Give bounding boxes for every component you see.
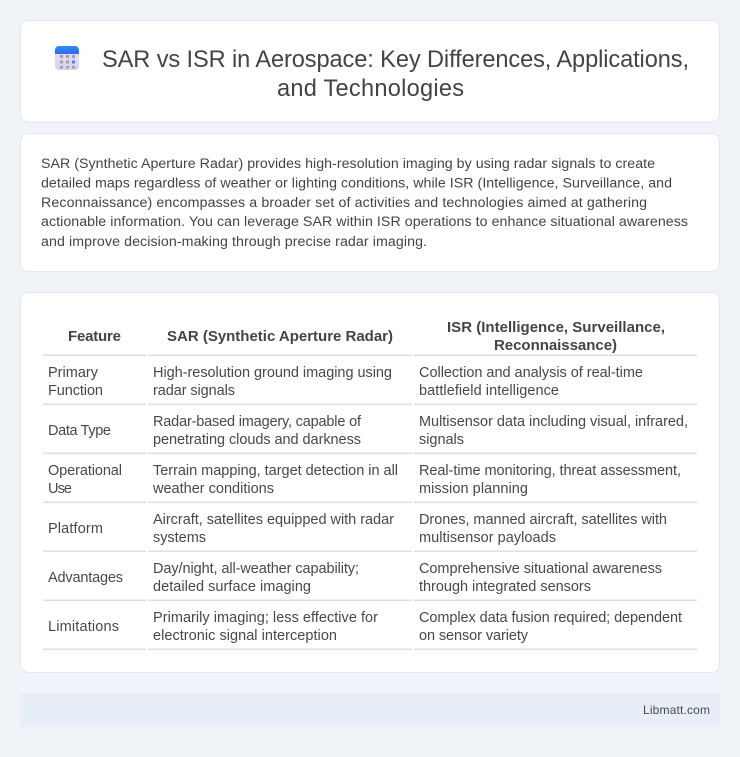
row: data type: signals bbox=[419, 432, 464, 448]
footer bar bbox=[20, 694, 720, 727]
row: operational use: Terrain mapping, target detection in all bbox=[153, 463, 398, 479]
row: data type: Radar-based imagery, capable of bbox=[153, 414, 362, 430]
row: platform: multisensor payloads bbox=[419, 530, 556, 546]
panel: header bbox=[20, 20, 720, 122]
row: limitations: Complex data fusion required; dependent bbox=[419, 610, 682, 626]
row: platform: Platform bbox=[48, 521, 103, 537]
row: limitations: Limitations bbox=[48, 619, 119, 635]
table header row: Feature bbox=[68, 328, 121, 345]
panel: comparison table bbox=[20, 292, 720, 672]
row: platform: Aircraft, satellites equipped with radar bbox=[153, 512, 394, 528]
row: limitations: Primarily imaging; less effective for bbox=[153, 610, 378, 626]
row: primary function: Collection and analysis of real-time bbox=[419, 365, 643, 381]
row: data type: Multisensor data including visual, infrared, bbox=[419, 414, 688, 430]
row: platform: Drones, manned aircraft, satellites with bbox=[419, 512, 667, 528]
row: primary function: battlefield intelligence bbox=[419, 383, 559, 399]
footer credit: Libmatt.com bbox=[643, 703, 710, 717]
row: operational use: Operational bbox=[48, 463, 122, 479]
table header row: SAR (Synthetic Aperture Radar) bbox=[167, 328, 393, 345]
row: data type bbox=[43, 414, 697, 454]
row: operational use: Real-time monitoring, threat assessment, bbox=[419, 463, 681, 479]
row: platform: systems bbox=[153, 530, 206, 546]
title bbox=[102, 47, 689, 102]
table header row: Reconnaissance) bbox=[494, 337, 617, 354]
row: operational use: Use bbox=[48, 481, 72, 497]
row: operational use: weather conditions bbox=[152, 481, 274, 497]
row: primary function: Primary bbox=[48, 365, 99, 381]
row: limitations: electronic signal interception bbox=[153, 628, 337, 644]
row: operational use: mission planning bbox=[419, 481, 528, 497]
intro text block: actionable information. You can leverage SAR within ISR operations to enhance situational awareness bbox=[41, 214, 688, 230]
row: operational use bbox=[43, 463, 697, 503]
row: limitations: on sensor variety bbox=[419, 628, 529, 644]
row: platform bbox=[43, 512, 697, 552]
row: primary function bbox=[43, 365, 697, 405]
row: advantages: through integrated sensors bbox=[419, 579, 591, 595]
panel: introduction bbox=[20, 134, 720, 272]
intro text block: and improve decision-making through precise radar imaging. bbox=[41, 234, 427, 250]
title: and Technologies bbox=[277, 76, 464, 102]
row: primary function: radar signals bbox=[153, 383, 235, 399]
row: data type: penetrating clouds and darkness bbox=[153, 432, 361, 448]
intro text block: SAR (Synthetic Aperture Radar) provides high-resolution imaging by using radar signals to create bbox=[41, 156, 655, 172]
intro card bbox=[20, 134, 720, 272]
icon: calendar bbox=[55, 46, 79, 70]
intro text block: Reconnaissance) encompasses a broader set of activities and technologies aimed at gathering bbox=[41, 195, 647, 211]
header card bbox=[20, 20, 720, 122]
row: primary function: Function bbox=[48, 383, 103, 399]
row: primary function: High-resolution ground imaging using bbox=[153, 365, 392, 381]
row: data type: Data Type bbox=[48, 423, 111, 439]
row: advantages bbox=[43, 561, 697, 601]
table card bbox=[20, 292, 720, 672]
row: advantages: Comprehensive situational awareness bbox=[419, 561, 662, 577]
table header row: ISR (Intelligence, Surveillance, bbox=[447, 319, 665, 336]
intro text block: detailed maps regardless of weather or lighting conditions, while ISR (Intelligence, Surveillance, and bbox=[41, 175, 672, 191]
footer bbox=[20, 694, 720, 727]
table header row bbox=[43, 319, 697, 356]
row: advantages: Day/night, all-weather capability; bbox=[153, 561, 359, 577]
row: limitations bbox=[43, 610, 697, 650]
row: advantages: Advantages bbox=[48, 570, 123, 586]
row: advantages: detailed surface imaging bbox=[153, 579, 311, 595]
title: SAR vs ISR in Aerospace: Key Differences, Applications, bbox=[102, 47, 689, 73]
intro text block bbox=[41, 156, 688, 250]
